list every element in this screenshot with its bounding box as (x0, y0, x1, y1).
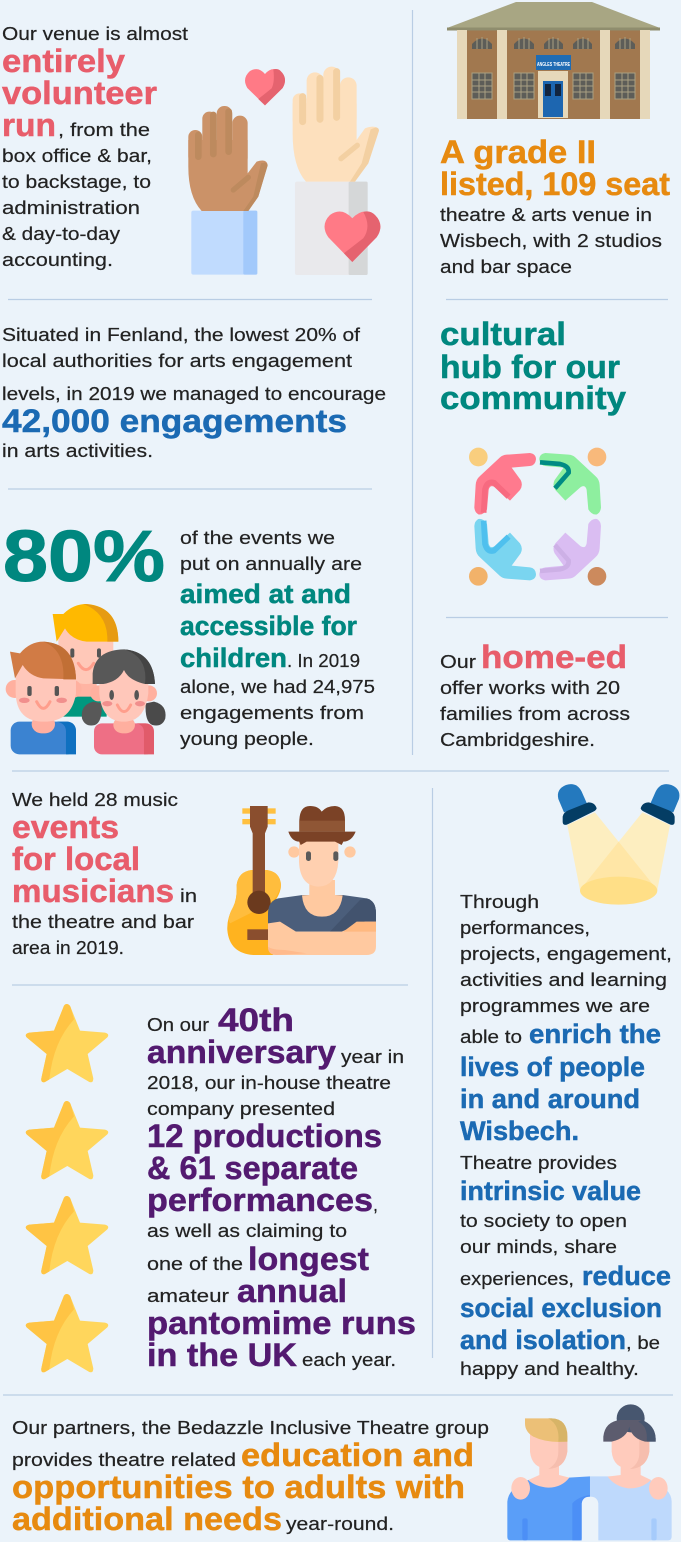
text block: volunteer run: box office & bar, (2, 146, 152, 166)
text block: local musicians: area in 2019. (12, 938, 124, 958)
text block: Bedazzle partners: provides theatre related (12, 1450, 236, 1470)
text block: children events: of the events we (180, 528, 335, 548)
text block: Bedazzle partners: opportunities to adults with (12, 1469, 465, 1505)
text block: 42,000 engagements: 42,000 engagements (2, 403, 347, 439)
text block: enrich lives: projects, engagement, (460, 944, 672, 964)
icon: theatre building (447, 2, 660, 119)
text block: enrich lives (460, 892, 672, 1379)
text block: home-ed: home-ed (481, 639, 627, 675)
text block: volunteer run: administration (2, 198, 140, 218)
text block: volunteer run (2, 24, 188, 270)
heading: cultural hub: hub for our (440, 349, 620, 385)
text block: grade II listed: Wisbech, with 2 studios (440, 231, 662, 251)
text block: local musicians: musicians (12, 873, 174, 909)
text block: volunteer run: & day-to-day (2, 224, 120, 244)
text block: enrich lives: happy and healthy. (460, 1359, 639, 1379)
text block: children events: engagements from (180, 703, 364, 723)
text block: home-ed: Cambridgeshire. (440, 730, 595, 750)
text block: local musicians: events (12, 809, 119, 845)
text block: 40th anniversary: longest (248, 1241, 369, 1277)
text block: enrich lives: Theatre provides (460, 1153, 617, 1173)
text block: volunteer run: , from the (58, 120, 150, 140)
text block: 40th anniversary: On our (147, 1015, 209, 1035)
text block: Bedazzle partners: education and (241, 1437, 474, 1473)
text block: volunteer run: to backstage, to (2, 172, 151, 192)
text block: Bedazzle partners: Our partners, the Bedazzle Inclusive Theatre group (12, 1418, 489, 1438)
icon: community circle of people (469, 448, 606, 586)
text block: enrich lives: programmes we are (460, 996, 650, 1016)
text block: volunteer run: accounting. (2, 250, 113, 270)
text block: enrich lives: social exclusion (460, 1293, 662, 1323)
text block: 42,000 engagements (2, 325, 386, 461)
text block: 40th anniversary: year in (341, 1047, 404, 1067)
icon: three children (6, 604, 166, 754)
text block: 40th anniversary: , (373, 1195, 378, 1215)
text block: grade II listed (440, 134, 670, 277)
text block: children events: children (180, 643, 287, 673)
icon: theatre building: ANGLES THEATRE (537, 62, 570, 68)
text block: 40th anniversary: one of the (147, 1254, 243, 1274)
text block: enrich lives: performances, (460, 918, 590, 938)
text block: enrich lives: reduce (582, 1261, 671, 1291)
icon: raised hands with hearts (188, 67, 380, 275)
text block: 40th anniversary: performances (147, 1182, 373, 1218)
text block: 40th anniversary: as well as claiming to (147, 1221, 347, 1241)
text block: enrich lives: in and around (460, 1084, 640, 1114)
text block: 40th anniversary (147, 1002, 416, 1373)
text block: 40th anniversary: each year. (302, 1350, 396, 1370)
text block: enrich lives: and isolation (460, 1325, 626, 1355)
text block: children events: accessible for (180, 611, 357, 641)
heading: cultural hub (440, 316, 626, 416)
text block: 40th anniversary: 12 productions (147, 1118, 382, 1154)
text block: enrich lives: lives of people (460, 1052, 645, 1082)
text block: local musicians: in (180, 886, 197, 906)
text block: local musicians (12, 790, 197, 958)
text block: enrich lives: to society to open (460, 1211, 627, 1231)
text block: children events: alone, we had 24,975 (180, 677, 375, 697)
text block: enrich lives: activities and learning (460, 970, 667, 990)
text block: Bedazzle partners: additional needs (12, 1501, 282, 1537)
heading: cultural hub: community (440, 380, 626, 416)
text block: Bedazzle partners (12, 1418, 489, 1537)
text block: 40th anniversary: anniversary (147, 1034, 336, 1070)
text block: local musicians: We held 28 music (12, 790, 178, 810)
text block: grade II listed: A grade II (440, 134, 596, 170)
statistic: 80%: 80% (3, 517, 165, 597)
text block: 40th anniversary: company presented (147, 1099, 335, 1119)
icons: four stars (26, 1004, 108, 1372)
text block: local musicians: for local (12, 841, 140, 877)
heading: cultural hub: cultural (440, 316, 566, 352)
icon: two friends embracing (507, 1404, 672, 1540)
text block: 42,000 engagements: Situated in Fenland, the lowest 20% of (2, 325, 361, 345)
text block: volunteer run: Our venue is almost (2, 24, 188, 44)
text block: 40th anniversary: in the UK (147, 1337, 298, 1373)
text block: children events: . In 2019 (287, 651, 360, 671)
text block: enrich lives: our minds, share (460, 1237, 617, 1257)
icon: stage spotlights (558, 784, 679, 905)
icon: musician with guitar (227, 806, 376, 955)
text block: enrich lives: able to (460, 1027, 522, 1047)
text block: grade II listed: and bar space (440, 257, 572, 277)
text block: grade II listed: listed, 109 seat (440, 166, 670, 202)
text block: 40th anniversary: 2018, our in-house theatre (147, 1073, 391, 1093)
text block: volunteer run: volunteer (2, 75, 157, 111)
text block: 40th anniversary: pantomime runs (147, 1305, 416, 1341)
text block: enrich lives: Through (460, 892, 539, 912)
text block: 40th anniversary: & 61 separate (147, 1150, 358, 1186)
text block: local musicians: the theatre and bar (12, 912, 194, 932)
text block: 42,000 engagements: local authorities for arts engagement (2, 351, 352, 371)
text block: 40th anniversary: amateur (147, 1286, 229, 1306)
text block: enrich lives: Wisbech. (460, 1116, 579, 1146)
text block: 40th anniversary: 40th (218, 1002, 294, 1038)
text block: home-ed: families from across (440, 704, 630, 724)
text block: 40th anniversary: annual (237, 1273, 347, 1309)
text block: children events: put on annually are (180, 554, 362, 574)
text block: children events: aimed at and (180, 579, 351, 609)
text block: children events (180, 528, 375, 749)
text block: 42,000 engagements: levels, in 2019 we managed to encourage (2, 384, 386, 404)
text block: volunteer run: entirely (2, 43, 125, 79)
text block: enrich lives: experiences, (460, 1269, 574, 1289)
text block: home-ed: offer works with 20 (440, 678, 620, 698)
text block: Bedazzle partners: year-round. (286, 1514, 394, 1534)
text block: children events: young people. (180, 729, 314, 749)
text block: enrich lives: intrinsic value (460, 1176, 641, 1206)
text block: home-ed: Our (440, 652, 476, 672)
text block: volunteer run: run (2, 107, 56, 143)
text block: 42,000 engagements: in arts activities. (2, 441, 153, 461)
text block: home-ed (440, 639, 630, 750)
text block: enrich lives: enrich the (529, 1019, 661, 1049)
text block: enrich lives: , be (626, 1333, 660, 1353)
text block: grade II listed: theatre & arts venue in (440, 205, 652, 225)
